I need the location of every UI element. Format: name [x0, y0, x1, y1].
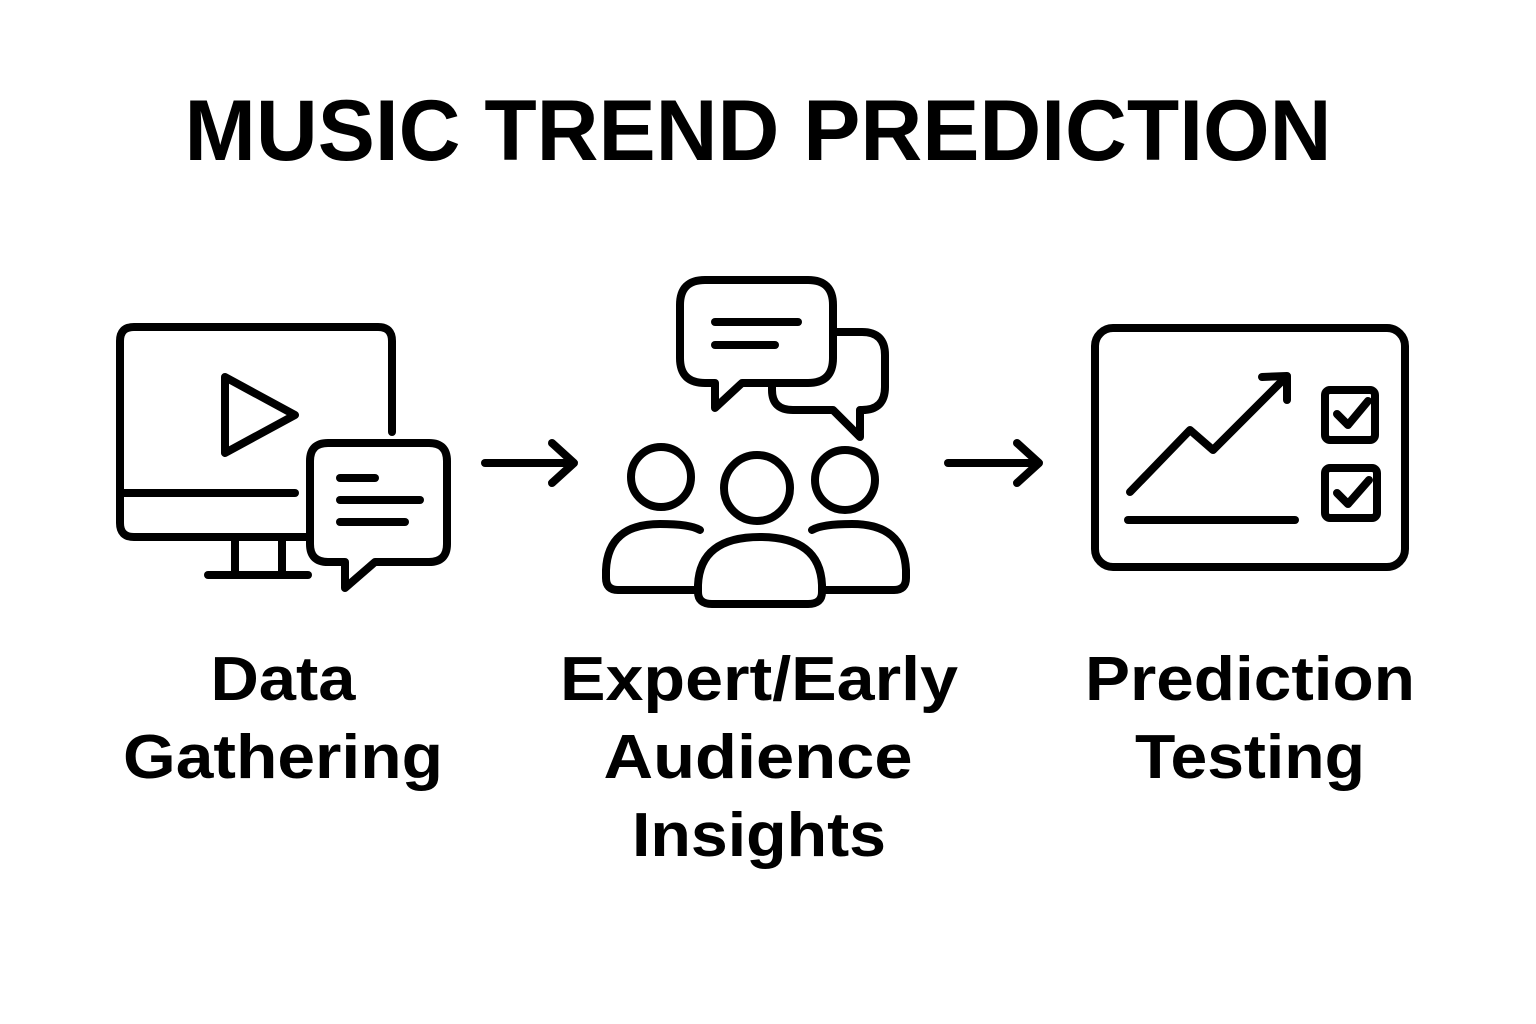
label: Expert/Early Audience Insights: [560, 645, 959, 870]
label: Expert/Early Audience Insights: Audience: [604, 723, 912, 792]
label: Data Gathering: [123, 645, 443, 792]
label: Prediction Testing: [1085, 645, 1415, 792]
label: Expert/Early Audience Insights: Expert/Early: [560, 645, 959, 714]
label: Prediction Testing: Prediction: [1085, 645, 1415, 714]
arrow 2: [948, 443, 1039, 483]
icon: audience with chat bubbles: [606, 280, 906, 604]
title: MUSIC TREND PREDICTION: [184, 83, 1332, 179]
label: Expert/Early Audience Insights: Insights: [632, 801, 886, 870]
arrow 1: [485, 443, 574, 483]
icon: monitor with chat: [120, 327, 447, 588]
icon: chart panel with checkboxes: [1095, 328, 1405, 567]
label: Data Gathering: Data: [210, 645, 356, 714]
label: Prediction Testing: Testing: [1135, 723, 1365, 792]
label: Data Gathering: Gathering: [123, 723, 443, 792]
